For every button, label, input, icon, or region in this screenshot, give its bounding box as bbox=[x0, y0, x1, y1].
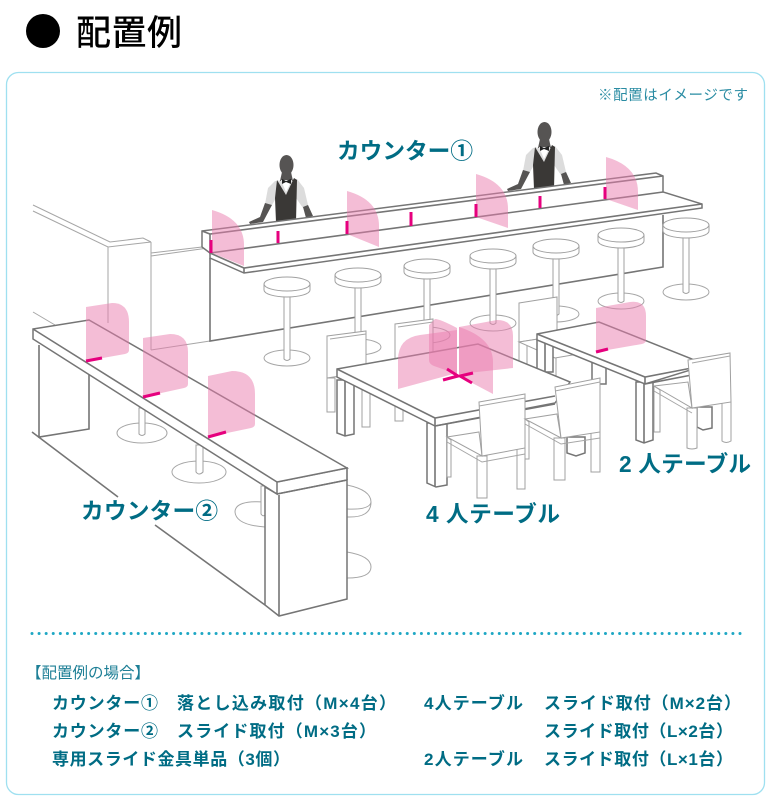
front chair 2 bbox=[525, 378, 600, 480]
counter 2 bbox=[32, 320, 347, 616]
counter 1 shields bbox=[212, 157, 638, 266]
counter 2 shields bbox=[86, 303, 255, 437]
list: left column bbox=[52, 693, 396, 769]
note: ※配置はイメージです bbox=[598, 87, 748, 104]
back chair at two-person table bbox=[519, 297, 590, 378]
list heading: 【配置例の場合】 bbox=[26, 664, 150, 682]
bartender right bbox=[507, 122, 571, 191]
list: right column bbox=[424, 693, 741, 769]
list: left column: 落とし込み取付（M×4台） bbox=[177, 693, 396, 713]
back left chair bbox=[327, 331, 370, 427]
back middle chair bbox=[395, 319, 433, 421]
list: right column: 2人テーブル bbox=[424, 749, 523, 769]
four-person table clamps bbox=[443, 369, 473, 383]
counter 2 stools bbox=[117, 408, 371, 578]
label: counter 2: カウンター② bbox=[81, 498, 218, 524]
front chair 1 bbox=[447, 394, 525, 498]
chair at two-person table bbox=[654, 353, 731, 449]
list: left column: 専用スライド金具単品（3個） bbox=[52, 749, 290, 769]
counter 1 body bbox=[210, 215, 663, 341]
label: four-person table: 4 人テーブル bbox=[426, 501, 560, 527]
title: 配置例 bbox=[76, 14, 182, 53]
counter 2 clamps bbox=[86, 358, 226, 437]
two-person table shield bbox=[596, 302, 646, 352]
four-person table bbox=[337, 344, 585, 487]
four-person table shields bbox=[398, 319, 513, 394]
dotted divider bbox=[32, 632, 740, 635]
list: left column: カウンター① bbox=[52, 694, 158, 713]
counter 1 top bbox=[202, 173, 702, 273]
two-person table clamp bbox=[596, 349, 608, 352]
list: left column: カウンター② bbox=[52, 722, 158, 741]
bartender left bbox=[249, 155, 313, 224]
list: right column: スライド取付（L×2台） bbox=[544, 721, 733, 741]
stool seats bbox=[264, 218, 709, 297]
counter 1 clamps bbox=[211, 187, 605, 253]
list: right column: スライド取付（L×1台） bbox=[544, 749, 733, 769]
label: two-person table: 2 人テーブル bbox=[619, 451, 751, 477]
list: right column: スライド取付（M×2台） bbox=[544, 693, 741, 713]
two-person table bbox=[537, 322, 712, 443]
illustration: wall and floor bbox=[33, 205, 210, 350]
label: counter 1: カウンター① bbox=[337, 138, 473, 164]
list: left column: スライド取付（M×3台） bbox=[177, 721, 376, 741]
list: right column: 4人テーブル bbox=[424, 693, 523, 713]
heading bullet bbox=[26, 14, 60, 48]
stool bases and poles bbox=[264, 230, 709, 366]
